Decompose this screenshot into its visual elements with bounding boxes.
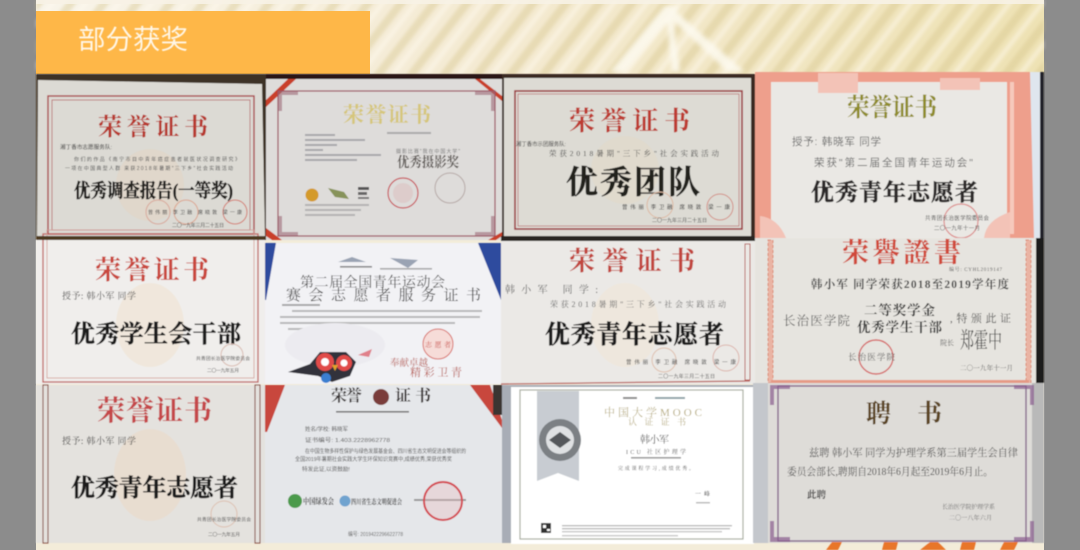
certificate 1: survey report: 一项在中国典型人群 来获2018年暑期"三下乡"社会实践活动 [65,165,233,172]
certificate 10: green development: 在中国生物多样性保护与绿色发展基金会、四川省生态文明促进会等组织的 [305,447,466,455]
certificate 12: appointment letter: 长治医学院护理学系 [942,503,995,511]
heading banner [36,11,370,74]
certificate 11: MOOC certificate [502,385,754,544]
certificate 5: student union cadre: 荣誉证书 [95,256,210,285]
certificate 8: scholarship: 韩小军 同学荣获2018至2019学年度 [811,277,1010,291]
certificate 7: volunteer, summer practice: 荣誉证书 [569,247,696,276]
certificate 5: student union cadre: 优秀学生会干部 [71,321,241,348]
bottom decorative orange shapes [826,542,1018,550]
certificate 10: green development: 编号: 2019422296622778 [348,530,403,538]
certificate 11: MOOC certificate: 认证证书 [628,416,686,427]
certificate 3: excellent team: 优秀团队 [566,164,700,200]
certificate 4: national youth games volunteer: 授予: 韩晓军 同学 [792,135,881,148]
certificate 1: survey report [36,74,266,240]
certificate 6: volunteer service: 第二届全国青年运动会 [300,274,445,291]
certificate 4: national youth games volunteer: 优秀青年志愿者 [811,179,978,205]
certificate 7: volunteer, summer practice: 韩小军 同学: [505,283,598,296]
certificate 12: appointment letter: 此聘 [807,489,826,501]
certificate 5: student union cadre: 共青团长治医学院委员会 [196,355,250,362]
certificate 8: scholarship: 优秀学生干部 [857,319,942,335]
certificate 4: national youth games volunteer: 荣获"第二届全国青年运动会" [814,156,973,169]
certificate 9: outstanding volunteer: 二〇一九年五月 [208,531,240,538]
certificate 1: survey report: 荣誉证书 [98,114,209,141]
certificate 6: volunteer service [265,243,501,384]
certificate 3: excellent team: 湘丁香市示团服务队: [516,140,566,148]
certificate 10: green development [265,385,502,543]
certificate 9: outstanding volunteer [36,385,265,543]
certificate 11: MOOC certificate: 韩小军 [640,433,669,446]
certificate 7: volunteer, summer practice [501,236,755,384]
certificate 3: excellent team: 二〇一九年三月二十五日 [652,217,707,224]
certificate 1: survey report: 湘丁香市志愿服务队: [60,143,112,151]
certificate 2: photography award: 优秀摄影奖 [397,154,459,171]
certificate 9: outstanding volunteer: 荣誉证书 [97,395,213,427]
certificate 4: national youth games volunteer: 共青团长治医学院委员会 [925,214,989,222]
certificate 3: excellent team: 荣誉证书 [569,107,691,136]
heading banner: 部分获奖 [78,25,188,55]
certificate 6: volunteer service: 赛会志愿者服务证书 [286,286,481,304]
certificate 9: outstanding volunteer: 授予: 韩小军 同学 [62,435,136,446]
certificate 1: survey report: 二〇一九年三月二十五日 [172,222,224,229]
certificate 8: scholarship: 院长 [940,338,954,347]
certificate 2: photography award: 荣誉证书 [343,103,432,127]
certificate 12: appointment letter: 兹聘 韩小军 同学为护理学系第三届学生会自律 [809,446,1018,459]
certificate 6: volunteer service: 精彩卫青 [410,365,462,379]
certificate 3: excellent team [502,74,755,240]
certificate 5: student union cadre: 授予: 韩小军 同学 [62,290,136,301]
certificate 10: green development: 四川省生态文明促进会 [351,497,402,506]
icon: owl mascot [288,349,372,383]
certificate 8: scholarship: 长治医学院 [783,314,850,328]
certificate 11: MOOC certificate: 一峰 [695,490,710,498]
certificate 6: volunteer service: 奉献卓越 [390,357,428,369]
certificate 8: scholarship: 长治医学院 [848,352,895,362]
certificate 8: scholarship: 荣譽證書 [842,237,961,268]
certificate 5: student union cadre [36,230,265,384]
certificate 1: survey report: 曾伟丽 李卫融 席晓敦 梁一康 [148,209,242,216]
certificate 12: appointment letter: 委员会部长,聘期自2018年6月起至2019年6月止。 [787,465,993,478]
certificate 9: outstanding volunteer: 优秀青年志愿者 [71,474,238,502]
certificate 8: scholarship: 二等奖学金 [864,302,936,318]
certificate 12: appointment letter: 二〇一八年六月 [949,514,992,522]
certificate 1: survey report: 你们的作品《南宁市目中青年癌症患者就医状况调查研究》 [74,156,240,163]
certificate 2: photography award [266,74,502,240]
certificate 8: scholarship: 郑霍中 [960,328,1002,353]
certificate 3: excellent team: 荣获2018暑期"三下乡"社会实践活动 [549,148,720,158]
certificate 8: scholarship [755,237,1044,385]
certificate 10: green development: 特发此证,以资鼓励! [302,465,350,473]
certificate 8: scholarship: 二〇一九年十一月 [960,363,1013,372]
qr code [541,523,551,533]
certificate 10: green development: 证书 [395,386,432,405]
certificate 1: survey report: 优秀调查报告(一等奖) [74,179,233,202]
certificate 7: volunteer, summer practice: 荣获2018暑期"三下乡"社会实践活动 [550,299,726,309]
certificate 3: excellent team: 曾伟丽 李卫融 席晓敦 梁一康 [622,203,730,211]
certificate 10: green development: 荣誉 [331,386,362,405]
certificate 7: volunteer, summer practice: 二〇一九年三月二十五日 [658,373,715,380]
certificate 9: outstanding volunteer: 共青团长治医学院委员会 [197,516,251,523]
certificate 12: appointment letter [753,383,1044,543]
certificate 6: volunteer service: 志愿者 [425,340,451,349]
certificate 4: national youth games volunteer: 荣誉证书 [847,94,938,122]
certificate 11: MOOC certificate: 完成课程学习,成绩优秀。 [618,465,694,472]
certificate 8: scholarship: ,特颁此证 [950,311,1011,325]
certificate 11: MOOC certificate: ICU 社区护理学 [626,448,686,456]
certificate 2: photography award: 摄影比赛"我在中国大学" [396,148,460,155]
certificate 10: green development: 全国2019年暑期社会实践大学生环保知识竞赛中,成绩优秀,荣获优秀奖 [295,455,452,463]
certificate 4: national youth games volunteer [755,72,1044,238]
certificate 7: volunteer, summer practice: 曾伟丽 李卫融 席晓敦 梁一康 [626,358,736,366]
certificate 10: green development: 中国绿发会 [303,496,334,506]
certificate 10: green development: 证书编号: 1.403.2228962778 [305,436,390,444]
certificate 5: student union cadre: 二〇一九年五月 [207,367,239,374]
certificate 4: national youth games volunteer: 二〇一九年十一月 [934,224,980,232]
certificate 7: volunteer, summer practice: 优秀青年志愿者 [545,320,724,349]
certificate 10: green development: 姓名/学校: 韩晓军 [305,425,348,433]
certificate 12: appointment letter: 聘书 [866,400,943,428]
certificate 8: scholarship: 编号: CYHL2019147 [949,266,1002,273]
certificate 11: MOOC certificate: 中国大学MOOC [604,405,702,419]
header background [36,0,1044,75]
